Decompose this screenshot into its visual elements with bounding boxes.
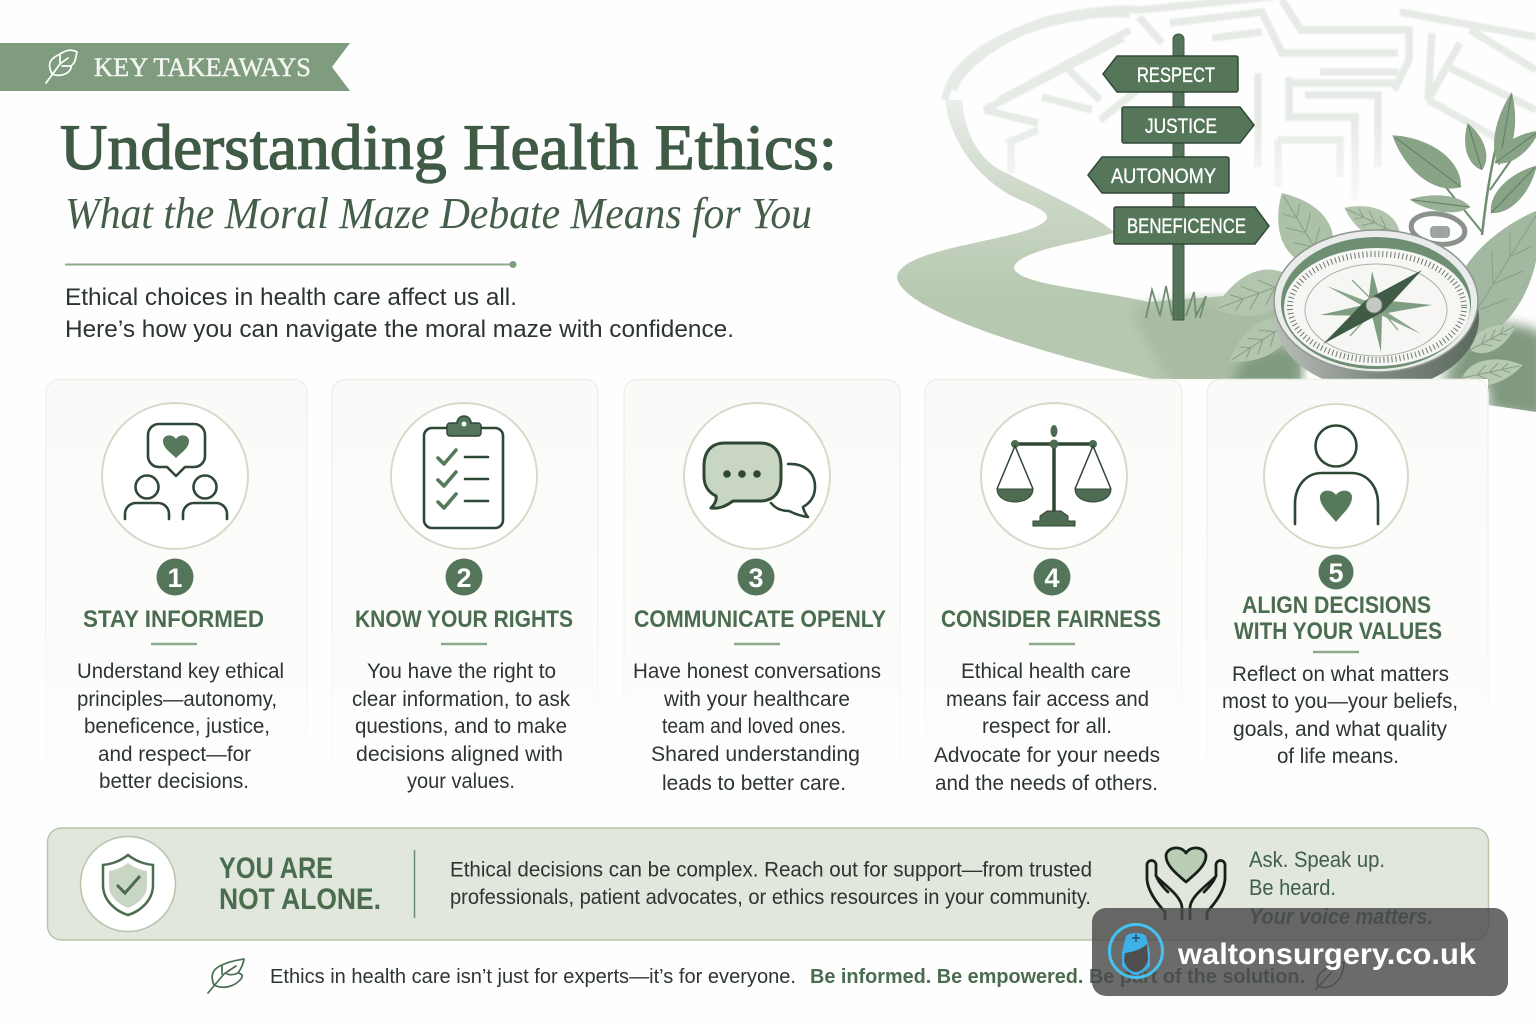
number badge 1: 1 [167,563,183,593]
body text: Ethical health care [961,660,1131,683]
sign: beneficence [1114,207,1269,244]
callout text [450,858,1092,909]
body text [352,660,570,793]
sign: justice: JUSTICE [1145,115,1217,138]
heading: WITH YOUR VALUES [1234,618,1442,645]
illustration: winding path and ground [897,90,1536,420]
footer line: Be informed. Be empowered. Be part of the solution. [810,965,1305,988]
sign: autonomy [1088,157,1229,193]
body text: Reflect on what matters [1232,663,1449,686]
body text: with your healthcare [663,688,850,711]
panel: stay informed [46,380,307,812]
illustration: foliage [1208,90,1536,390]
body text [633,660,881,795]
icon: speech bubbles [704,443,815,517]
ribbon: key takeaways [0,43,350,91]
compass star [1320,271,1432,352]
number badge 1 [156,558,194,596]
body text: clear information, to ask [352,688,570,711]
sign: beneficence: BENEFICENCE [1127,215,1246,238]
icon: clipboard checklist [424,416,503,528]
sign: respect [1103,56,1238,92]
callout heading: YOU ARE [219,852,333,885]
illustration: maze background [945,0,1536,200]
callout heading: NOT ALONE. [219,883,381,916]
heading: CONSIDER FAIRNESS [941,606,1161,633]
number badge 3 [738,558,774,596]
illustration: signpost [1088,34,1269,320]
sign: justice [1122,107,1254,143]
heading [1234,592,1442,645]
callout motto: Be heard. [1249,875,1336,900]
icon: leaf [46,50,77,83]
icon: balance scales [997,425,1111,526]
number badge 4 [1034,558,1070,596]
icon: footer leaf right [1315,962,1344,990]
panel: know your rights [332,380,598,812]
body text: goals, and what quality [1233,718,1448,741]
icon: people and heart bubble [125,424,227,519]
body text: decisions aligned with [356,743,563,766]
heading: KNOW YOUR RIGHTS [355,606,573,633]
panel: align decisions [1207,380,1488,812]
sign: autonomy: AUTONOMY [1111,165,1216,188]
body text [77,660,284,793]
body text: Have honest conversations [633,660,881,683]
callout heading [219,852,381,916]
callout motto: Ask. Speak up. [1249,847,1385,872]
body text: your values. [407,770,515,793]
sign: respect: RESPECT [1137,64,1215,87]
watermark: waltonsurgery.co.uk [1177,938,1476,971]
callout text: Ethical decisions can be complex. Reach out for support—from trusted [450,858,1092,882]
body text: of life means. [1277,745,1399,768]
icon: shield [80,836,176,932]
callout text: professionals, patient advocates, or ethics resources in your community. [450,886,1091,909]
title: Understanding Health Ethics: [60,112,837,184]
heading: COMMUNICATE OPENLY [634,606,886,633]
intro text: Here’s how you can navigate the moral maze with confidence. [65,316,734,343]
body text: Advocate for your needs [934,744,1160,767]
intro text [65,284,734,343]
icon: hands holding heart [1147,848,1225,919]
body text: respect for all. [982,715,1112,738]
icon: nurse logo [1110,924,1162,978]
body text [1222,663,1458,768]
number badge 5 [1318,554,1354,590]
body text: principles—autonomy, [77,688,277,711]
body text: You have the right to [367,660,556,683]
intro text: Ethical choices in health care affect us all. [65,284,517,311]
callout motto [1249,847,1433,929]
icon: footer leaf left [208,959,244,993]
panel: consider fairness [925,380,1182,812]
number badge 2: 2 [456,563,472,593]
watermark [1092,908,1508,996]
subtitle: What the Moral Maze Debate Means for You [65,189,812,238]
body text: beneficence, justice, [84,715,270,738]
footer line [208,959,1344,993]
number badge 2 [446,558,482,596]
heading: ALIGN DECISIONS [1242,592,1431,619]
body text: means fair access and [946,688,1149,711]
body text: better decisions. [99,770,249,793]
number badge 5: 5 [1328,558,1344,588]
footer line: Ethics in health care isn’t just for experts—it’s for everyone. [270,965,796,988]
body text: Shared understanding [651,743,860,766]
panel: you are not alone [48,828,1488,940]
illustration: compass [1274,210,1479,390]
body text: team and loved ones. [662,715,846,738]
callout motto: Your voice matters. [1249,904,1433,929]
body text: most to you—your beliefs, [1222,690,1458,713]
number badge 4: 4 [1044,563,1060,593]
heading: STAY INFORMED [83,606,264,633]
body text: questions, and to make [355,715,567,738]
panel: communicate openly [624,380,900,812]
body text: and respect—for [98,743,251,766]
body text [934,660,1160,795]
number badge 3: 3 [748,563,764,593]
body text: and the needs of others. [935,772,1158,795]
icon: person with heart [1295,426,1378,524]
body text: Understand key ethical [77,660,284,683]
body text: leads to better care. [662,772,846,795]
ribbon: key takeaways: KEY TAKEAWAYS [94,53,311,82]
